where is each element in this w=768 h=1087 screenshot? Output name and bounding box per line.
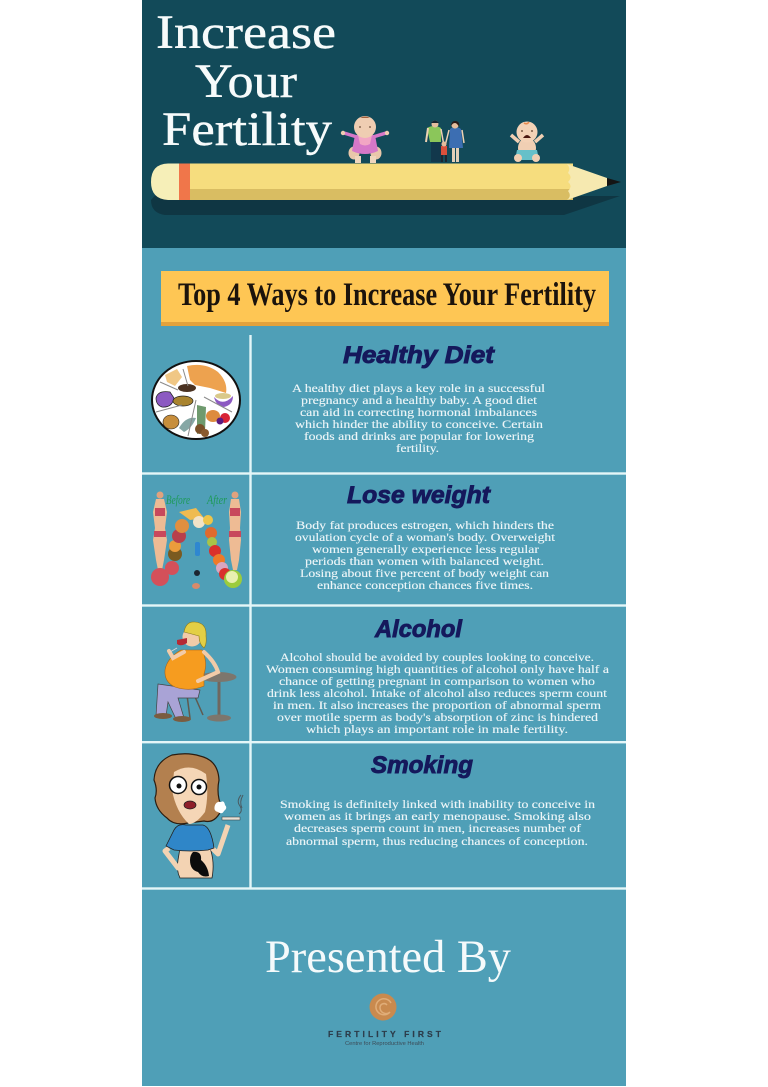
text block: Women consuming high quantities of alcohol only have half a bbox=[266, 664, 609, 676]
banner: Top 4 Ways to Increase Your Fertility bbox=[178, 277, 596, 313]
text block: in men. It also increases the proportion of abnormal sperm bbox=[273, 700, 601, 712]
icon: food plate bbox=[152, 361, 240, 439]
title: Your bbox=[195, 55, 297, 108]
icon: pencil bbox=[151, 164, 621, 215]
text block: periods than women with balanced weight. bbox=[305, 556, 544, 568]
heading: Presented By bbox=[265, 931, 511, 983]
banner bbox=[161, 271, 609, 326]
text block: can aid in correcting hormonal imbalances bbox=[300, 407, 538, 419]
title: Increase bbox=[156, 6, 336, 59]
text block: enhance conception chances five times. bbox=[317, 580, 533, 592]
icon: pregnant woman drinking bbox=[154, 622, 236, 722]
icon: before and after food arch: Before bbox=[166, 492, 190, 507]
text block: abnormal sperm, thus reducing chances of conception. bbox=[286, 836, 588, 848]
icon: fertility first logo bbox=[370, 994, 396, 1020]
text block: pregnancy and a healthy baby. A good diet bbox=[301, 395, 538, 407]
text block bbox=[292, 383, 545, 455]
panel: alcohol bbox=[154, 616, 609, 736]
text block bbox=[280, 799, 595, 848]
text block: A healthy diet plays a key role in a successful bbox=[292, 383, 545, 395]
text block: ovulation cycle of a woman's body. Overweight bbox=[295, 532, 556, 544]
heading: Healthy Diet bbox=[343, 342, 495, 369]
heading: Alcohol bbox=[374, 616, 463, 643]
text block: Losing about five percent of body weight can bbox=[300, 568, 549, 580]
header background bbox=[142, 0, 626, 248]
text block: foods and drinks are popular for lowering bbox=[304, 431, 534, 443]
icon: family bbox=[426, 120, 464, 162]
logo wordmark: FERTILITY FIRST bbox=[328, 1029, 442, 1039]
logo wordmark bbox=[328, 1029, 442, 1047]
footer: presented by bbox=[265, 931, 511, 1047]
text block: over motile sperm as body's absorption of zinc is hindered bbox=[277, 712, 598, 724]
panel: lose weight bbox=[151, 482, 556, 592]
icon: before and after food arch: After bbox=[206, 492, 228, 507]
heading: Smoking bbox=[371, 752, 473, 779]
icon: crying baby bbox=[511, 122, 543, 162]
panel: smoking bbox=[154, 752, 595, 878]
text block bbox=[295, 520, 556, 592]
panel: header bbox=[142, 0, 626, 248]
title: Fertility bbox=[162, 103, 332, 156]
icon: baby in pink bbox=[341, 116, 389, 163]
text block: fertility. bbox=[396, 443, 439, 455]
text block: women generally experience less regular bbox=[312, 544, 539, 556]
text block: Smoking is definitely linked with inability to conceive in bbox=[280, 799, 595, 811]
icon: before and after food arch bbox=[151, 492, 242, 589]
logo wordmark: Centre for Reproductive Health bbox=[345, 1041, 424, 1047]
text block: drink less alcohol. Intake of alcohol also reduces sperm count bbox=[267, 688, 608, 700]
panel: page body bbox=[142, 0, 626, 1086]
heading: Lose weight bbox=[347, 482, 491, 509]
text block: decreases sperm count in men, increases number of bbox=[294, 823, 581, 835]
panel: healthy diet bbox=[152, 342, 545, 455]
text block: Alcohol should be avoided by couples looking to conceive. bbox=[280, 652, 594, 664]
icon: pregnant woman smoking bbox=[154, 754, 243, 878]
text block bbox=[266, 652, 609, 736]
text block: which plays an important role in male fertility. bbox=[306, 724, 568, 736]
text block: Body fat produces estrogen, which hinders the bbox=[296, 520, 554, 532]
text block: women as it brings an early menopause. Smoking also bbox=[284, 811, 591, 823]
text block: chance of getting pregnant in comparison to women who bbox=[279, 676, 595, 688]
title bbox=[156, 6, 336, 156]
text block: which hinder the ability to conceive. Certain bbox=[295, 419, 543, 431]
